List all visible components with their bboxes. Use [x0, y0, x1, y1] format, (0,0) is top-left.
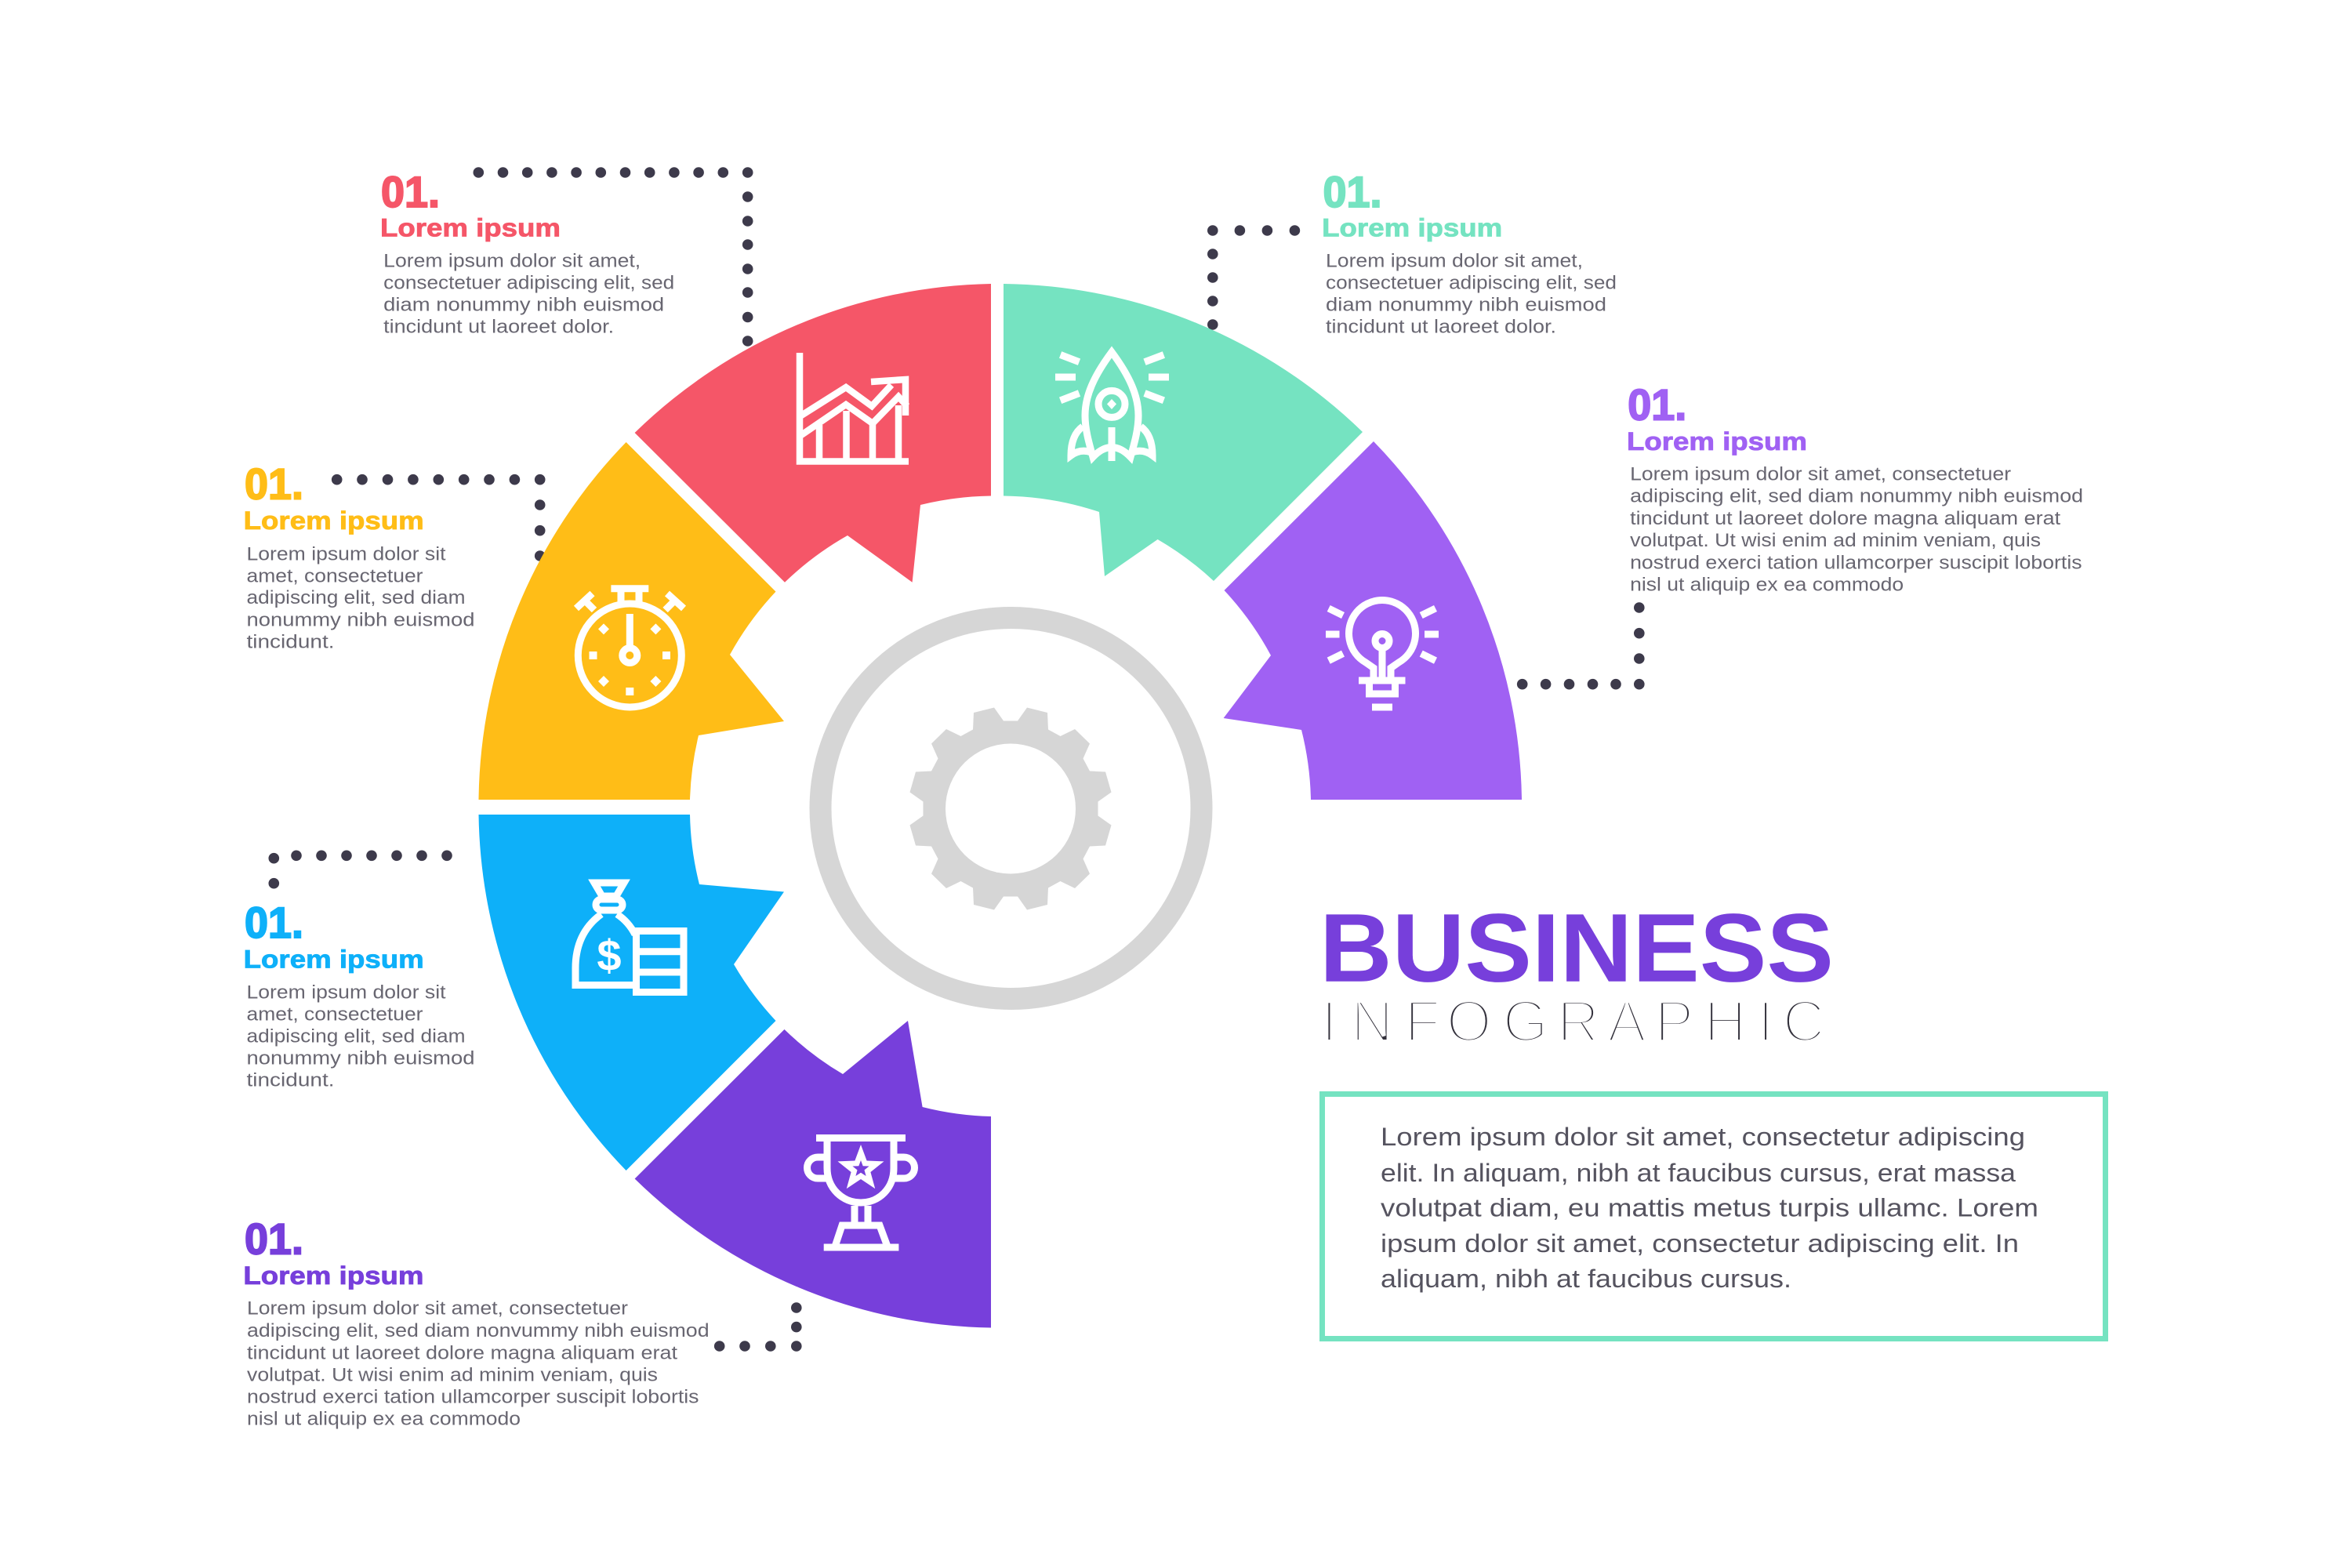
number: 01.	[1628, 379, 1686, 429]
heading: Lorem ipsum	[1627, 427, 1807, 456]
paragraph: elit. In aliquam, nibh at faucibus cursus, erat massa	[1381, 1159, 2016, 1187]
body: adipiscing elit, sed diam nonvummy nibh euismod	[247, 1320, 710, 1341]
panel: teal segment	[1004, 284, 1363, 581]
connector: blue dotted line	[268, 850, 452, 888]
connector: yellow dotted line	[332, 474, 546, 561]
body	[383, 251, 674, 337]
shape: coral wedge	[635, 284, 991, 583]
paragraph: volutpat diam, eu mattis metus turpis ullamc. Lorem	[1381, 1194, 2038, 1222]
body: tincidunt ut laoreet dolor.	[1326, 316, 1556, 337]
shape: yellow wedge	[478, 442, 784, 800]
body: nisl ut aliquip ex ea commodo	[1630, 574, 1904, 595]
body: amet, consectetuer	[246, 565, 423, 586]
body: tincidunt ut laoreet dolore magna aliquam erat	[247, 1342, 677, 1363]
heading: Lorem ipsum	[380, 214, 561, 242]
body: nonummy nibh euismod	[246, 609, 475, 630]
connector: deep purple dotted line	[714, 1302, 802, 1352]
heading: Lorem ipsum	[1322, 214, 1502, 242]
title: BUSINESS: BUSINESS	[1319, 895, 1834, 1003]
body: consectetuer adipiscing elit, sed	[383, 273, 674, 294]
dollar sign: $	[597, 931, 622, 980]
icon: rocket	[1055, 352, 1169, 461]
paragraph: Lorem ipsum dolor sit amet, consectetur adipiscing	[1381, 1123, 2025, 1151]
text block: yellow callout	[244, 459, 475, 653]
panel: deep purple segment	[635, 1021, 991, 1328]
paragraph	[1381, 1123, 2038, 1293]
text block: deep purple callout	[243, 1214, 710, 1430]
panel: purple segment	[1224, 441, 1522, 800]
body: Lorem ipsum dolor sit amet, consectetuer	[1630, 464, 2011, 485]
body: amet, consectetuer	[246, 1004, 423, 1025]
paragraph: ipsum dolor sit amet, consectetur adipiscing elit. In	[1381, 1229, 2019, 1258]
panel: yellow segment	[478, 442, 784, 800]
body: adipiscing elit, sed diam	[246, 1025, 466, 1047]
body: nonummy nibh euismod	[246, 1047, 475, 1069]
body: volutpat. Ut wisi enim ad minim veniam, quis	[247, 1364, 658, 1385]
body	[1326, 251, 1617, 337]
text block: blue callout	[244, 898, 475, 1091]
center gear	[909, 707, 1112, 909]
body: Lorem ipsum dolor sit amet, consectetuer	[247, 1298, 628, 1319]
shape: teal wedge	[1004, 284, 1363, 581]
icon: money bag and coins	[575, 883, 684, 993]
icon: trophy	[808, 1138, 914, 1247]
text block: teal callout	[1322, 167, 1617, 337]
center ring	[820, 618, 1201, 999]
connector: teal dotted line	[1207, 225, 1300, 330]
body: consectetuer adipiscing elit, sed	[1326, 273, 1617, 294]
heading: Lorem ipsum	[243, 1261, 423, 1290]
body: diam nonummy nibh euismod	[383, 295, 664, 316]
icon: light bulb	[1326, 601, 1439, 707]
paragraph: aliquam, nibh at faucibus cursus.	[1381, 1265, 1791, 1293]
shape: purple wedge	[1224, 441, 1522, 800]
body: tincidunt ut laoreet dolor.	[383, 316, 614, 337]
number: 01.	[381, 167, 440, 216]
body: adipiscing elit, sed diam	[246, 587, 466, 608]
body: tincidunt ut laoreet dolore magna aliquam erat	[1630, 508, 2060, 529]
body: adipiscing elit, sed diam nonummy nibh euismod	[1630, 486, 2083, 507]
body	[247, 1298, 710, 1430]
shape: deep purple wedge	[635, 1021, 991, 1328]
connector: coral dotted line	[474, 167, 753, 347]
shape: blue wedge	[478, 815, 784, 1171]
number: 01.	[1323, 167, 1381, 216]
text block: coral callout	[380, 167, 674, 337]
text block: purple callout	[1627, 379, 2083, 595]
body: Lorem ipsum dolor sit amet,	[1326, 251, 1583, 272]
body: tincidunt.	[246, 1070, 334, 1091]
icon: rising chart	[800, 353, 909, 461]
panel: blue segment	[478, 815, 784, 1171]
heading: Lorem ipsum	[244, 946, 424, 974]
panel: coral segment	[635, 284, 991, 583]
body	[246, 982, 475, 1091]
callout box	[1322, 1094, 2106, 1339]
body	[1630, 464, 2083, 595]
connector: purple dotted line	[1517, 602, 1645, 690]
number: 01.	[245, 898, 303, 947]
body: nisl ut aliquip ex ea commodo	[247, 1409, 521, 1430]
body: volutpat. Ut wisi enim ad minim veniam, quis	[1630, 530, 2041, 551]
number: 01.	[245, 459, 303, 509]
body: nostrud exerci tation ullamcorper suscipit lobortis	[1630, 552, 2082, 573]
heading: Lorem ipsum	[244, 506, 424, 535]
body: diam nonummy nibh euismod	[1326, 295, 1606, 316]
number: 01.	[245, 1214, 303, 1263]
icon: stopwatch	[576, 589, 684, 707]
body: Lorem ipsum dolor sit	[246, 982, 446, 1003]
body: Lorem ipsum dolor sit amet,	[383, 251, 641, 272]
body	[246, 543, 475, 653]
box border	[1322, 1094, 2106, 1339]
body: tincidunt.	[246, 632, 334, 653]
body: nostrud exerci tation ullamcorper suscipit lobortis	[247, 1387, 699, 1408]
body: Lorem ipsum dolor sit	[246, 543, 446, 564]
subtitle: INFOGRAPHIC: INFOGRAPHIC	[1321, 988, 1825, 1054]
